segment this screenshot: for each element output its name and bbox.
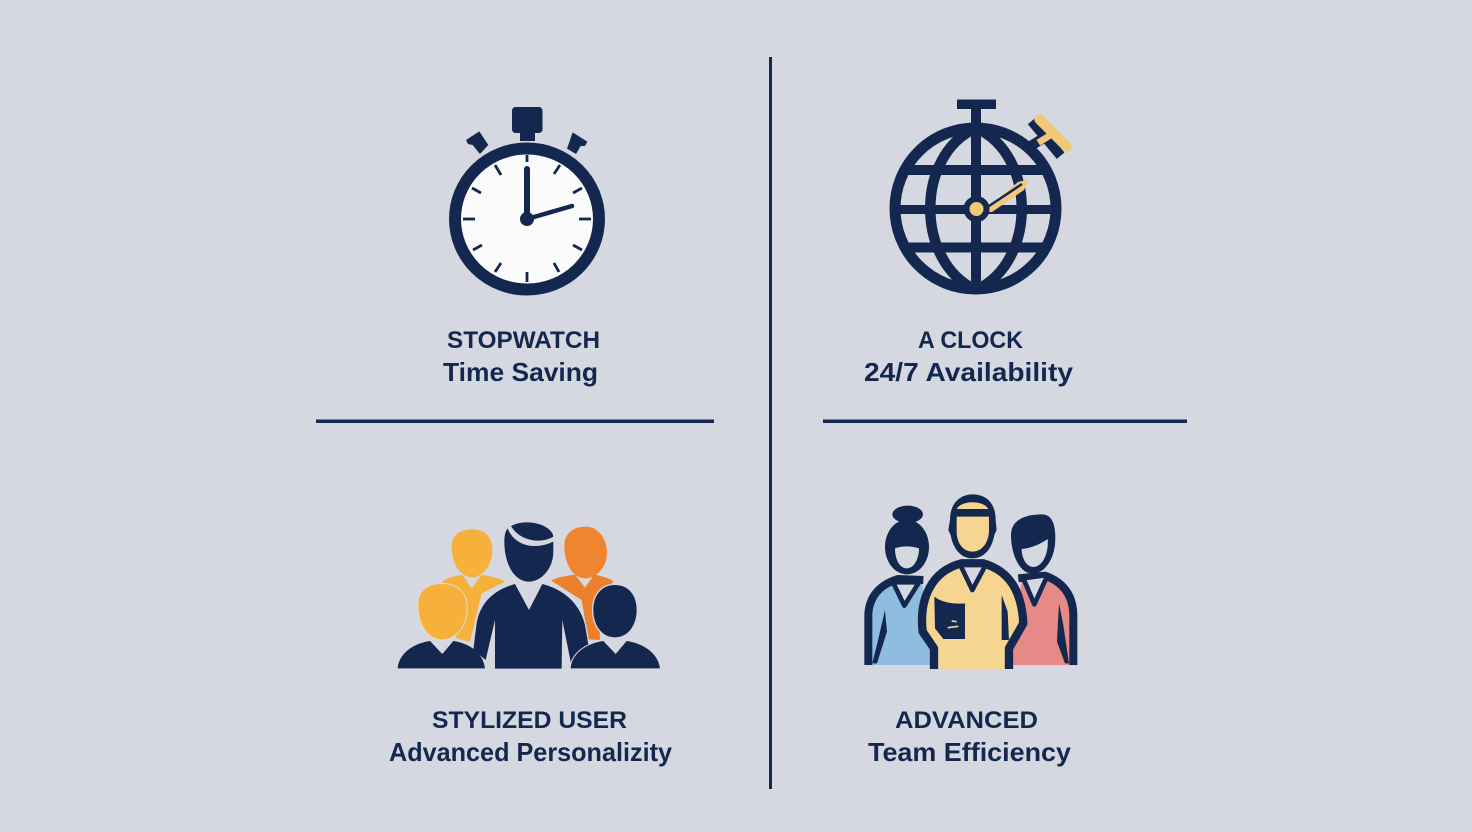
icon: team of three bbox=[868, 494, 1073, 669]
text: clock label bbox=[864, 327, 1074, 387]
text: advanced label bbox=[868, 707, 1072, 767]
text: stylized user label bbox=[389, 707, 673, 767]
panel: stopwatch time saving bbox=[443, 107, 600, 387]
middle person head bbox=[948, 494, 997, 558]
text: clock label: A CLOCK bbox=[918, 327, 1024, 354]
left person body bbox=[868, 579, 935, 665]
right person head bbox=[1011, 514, 1055, 574]
icon: stopwatch bbox=[455, 107, 599, 290]
text: advanced label: Team Efficiency bbox=[868, 737, 1072, 767]
icon: stylized user group bbox=[398, 522, 660, 669]
left person head bbox=[885, 506, 929, 574]
text: advanced label: ADVANCED bbox=[895, 707, 1038, 734]
text: clock label: 24/7 Availability bbox=[864, 357, 1074, 387]
right person body bbox=[1010, 575, 1073, 665]
text: stopwatch label: STOPWATCH bbox=[447, 327, 600, 354]
text: stopwatch label: Time Saving bbox=[443, 357, 598, 387]
panel: stylized user advanced personality bbox=[389, 522, 673, 767]
text: stylized user label: Advanced Personalizity bbox=[389, 737, 673, 767]
middle person body bbox=[922, 563, 1023, 669]
panel: advanced team efficiency bbox=[868, 494, 1073, 767]
text: stylized user label: STYLIZED USER bbox=[432, 707, 627, 734]
panel: clock 24/7 availability bbox=[864, 100, 1074, 387]
icon: globe clock bbox=[885, 100, 1067, 290]
text: stopwatch label bbox=[443, 327, 600, 387]
